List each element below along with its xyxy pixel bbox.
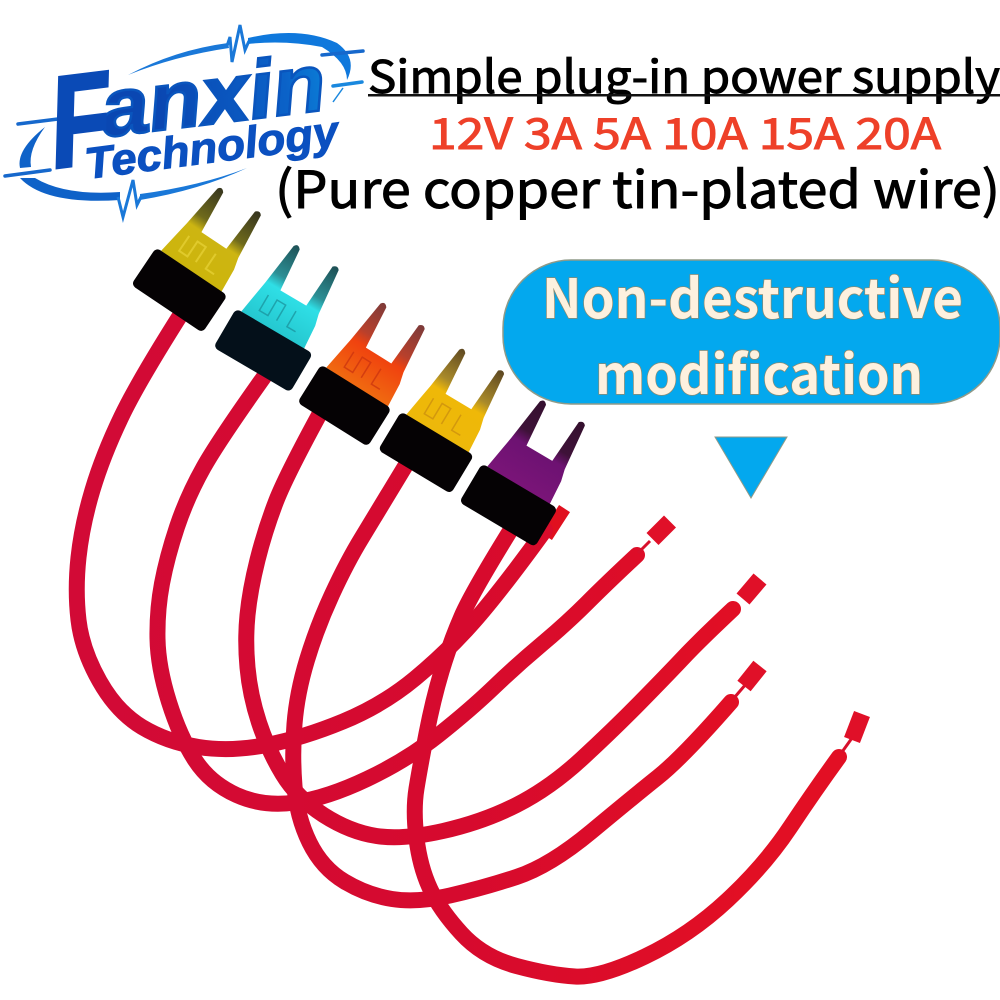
wires: five red cables <box>77 300 862 977</box>
wire 2 <box>157 360 637 804</box>
callout: non-destructive modification: modification <box>595 331 923 410</box>
wire 1 tip behind purple fuse <box>550 514 561 531</box>
logo: Fanxin Technology <box>5 25 363 217</box>
logo swoosh and pulse lines <box>5 25 363 217</box>
fuse 4: amber <box>378 337 519 494</box>
wire 5 <box>415 515 839 977</box>
arrow: pointing down <box>715 437 787 498</box>
subtitle: pure copper wire: (Pure copper tin-plated wire) <box>275 149 1000 223</box>
fuse 5: purple <box>459 389 602 547</box>
wire 5 neck and head <box>842 714 862 752</box>
logo letter: F: F <box>41 43 123 196</box>
wire 4 neck and head <box>734 666 760 698</box>
callout: non-destructive modification <box>503 255 1000 410</box>
wire 3 head <box>743 579 760 599</box>
callout: non-destructive modification: Non-destructive <box>542 255 963 334</box>
logo word: Fanxin: anxin <box>95 37 331 155</box>
fuse 3: orange <box>297 291 438 447</box>
wire 1 <box>77 300 545 749</box>
fuse 2: aqua <box>213 233 357 392</box>
wire 4 <box>293 450 731 900</box>
fuse 1: yellow <box>131 175 276 333</box>
wire 3 <box>246 395 733 837</box>
logo word: Technology: Technology <box>82 107 344 189</box>
wire 2 neck and head <box>638 522 670 553</box>
subtitle: voltage and amperage list: 12V 3A 5A 10A 15A 20A <box>429 100 941 162</box>
title: Simple plug-in power supply: Simple plug-in power supply <box>368 41 1000 106</box>
